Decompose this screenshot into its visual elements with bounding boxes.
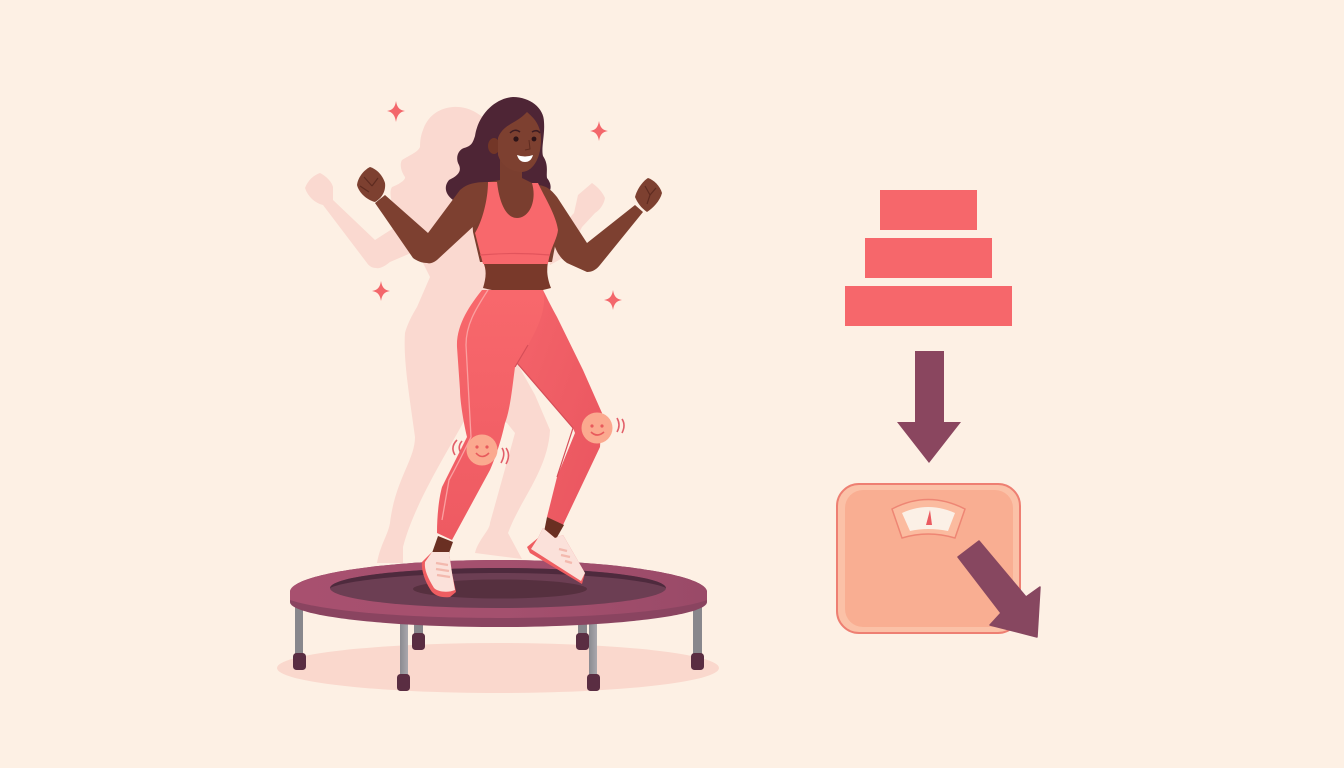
happy knee left	[453, 434, 508, 466]
front leg	[437, 290, 544, 540]
ghost silhouette of the woman	[305, 107, 605, 563]
leg shading and side stripe	[515, 345, 573, 477]
ankles	[432, 536, 453, 553]
right shoe	[527, 528, 585, 584]
midriff	[483, 262, 551, 292]
sparkles	[372, 101, 622, 310]
trend down arrow	[958, 541, 1040, 637]
down arrow	[897, 351, 961, 463]
sports top	[475, 182, 558, 264]
bathroom scale	[837, 484, 1020, 633]
frame rim	[290, 560, 707, 627]
front legs	[293, 600, 704, 691]
ear	[488, 138, 500, 154]
left shoe	[422, 552, 456, 597]
left fist	[357, 167, 385, 202]
trampoline	[290, 560, 707, 691]
face	[498, 112, 541, 172]
mat	[330, 568, 666, 608]
right arm	[538, 185, 643, 272]
skin: neck and shoulders	[470, 160, 558, 262]
left arm	[375, 182, 490, 263]
woman	[357, 97, 662, 597]
happy knee right	[582, 412, 624, 444]
back leg	[517, 290, 602, 525]
right fist	[635, 178, 662, 212]
floor shadow	[277, 643, 719, 693]
scale dial	[892, 500, 965, 538]
hair	[446, 97, 551, 200]
stacked bars icon	[845, 190, 1012, 326]
facial features	[510, 130, 540, 162]
back legs	[412, 620, 589, 650]
leggings	[437, 290, 602, 540]
